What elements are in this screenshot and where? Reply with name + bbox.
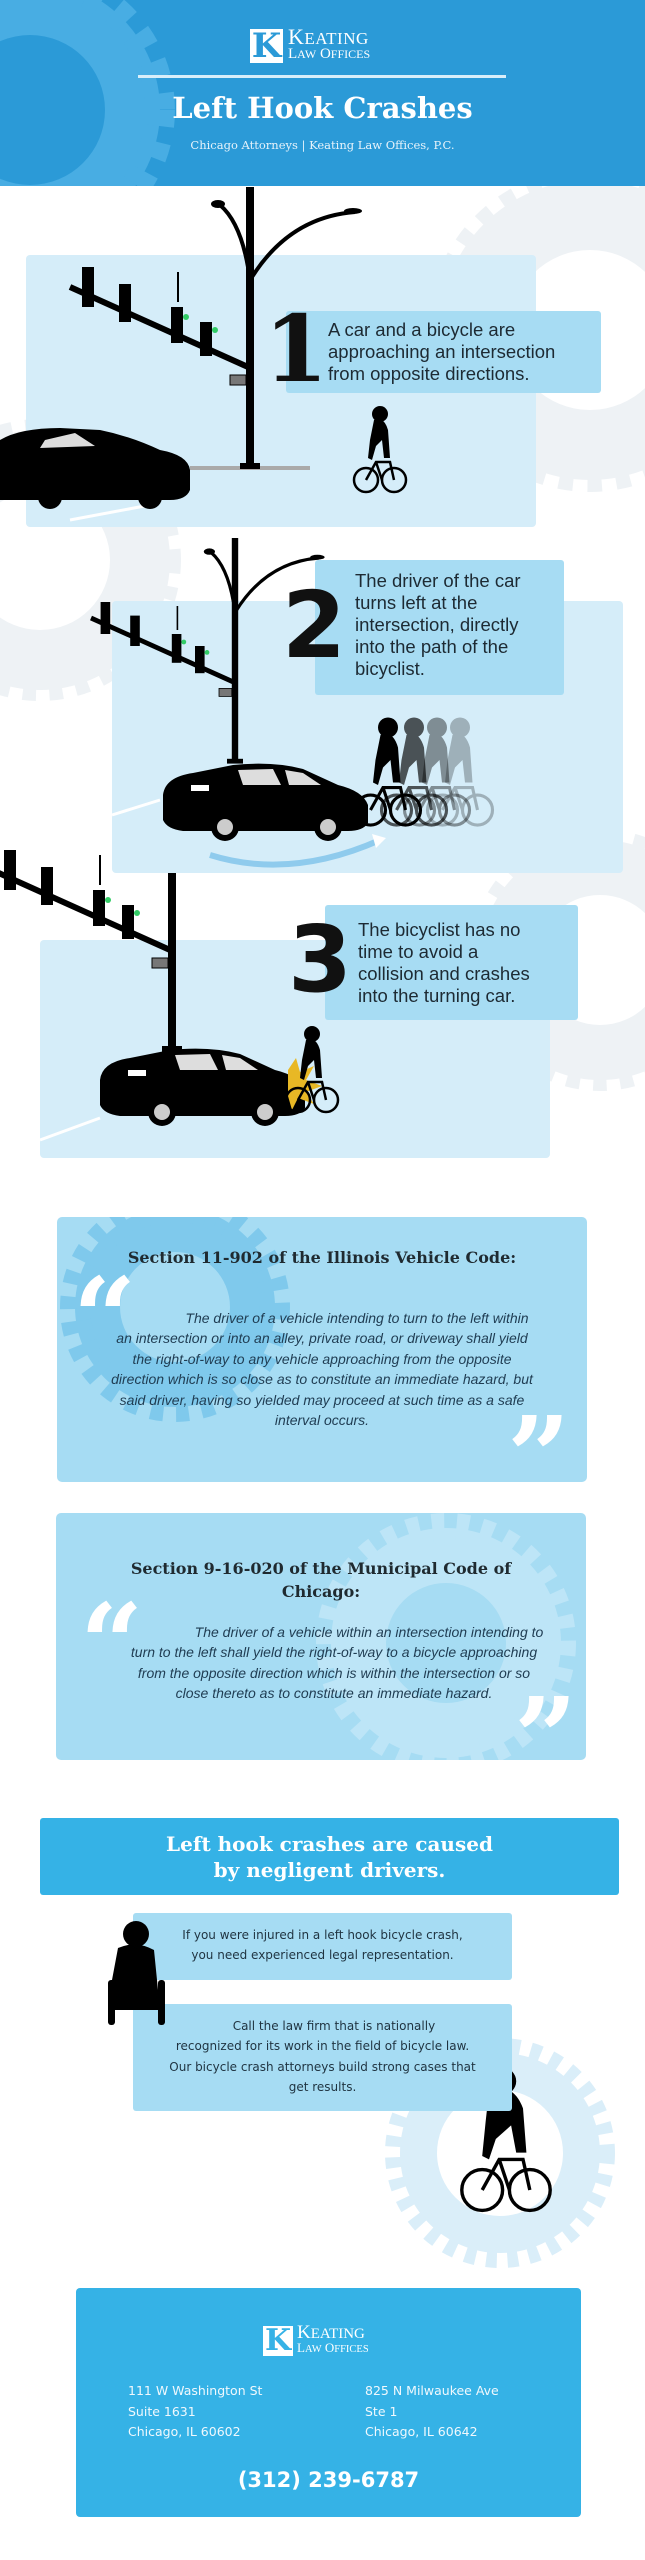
quote box: Municipal Code of Chicago: close thereto as to constitute an immediate hazard. bbox=[176, 1685, 492, 1701]
number 2: 2 bbox=[282, 572, 346, 679]
logo bbox=[250, 24, 370, 66]
quote box: Illinois Vehicle Code: interval occurs. bbox=[275, 1412, 369, 1428]
quote box: Illinois Vehicle Code: The driver of a vehicle intending to turn to the left within bbox=[185, 1310, 529, 1326]
step 2 text: turns left at the bbox=[355, 592, 477, 613]
banner: by negligent drivers. bbox=[214, 1858, 445, 1882]
address 1 bbox=[128, 2383, 262, 2439]
address 2 bbox=[365, 2383, 499, 2439]
quote box: Municipal Code of Chicago: from the opposite direction which is within the intersection or so bbox=[138, 1665, 530, 1681]
panel: step 1 bbox=[26, 255, 536, 527]
illustration: step 2 scene bbox=[90, 538, 494, 868]
address 2: Chicago, IL 60642 bbox=[365, 2424, 478, 2439]
quote box: Illinois Vehicle Code: direction which is so close as to constitute an immediate hazard, but bbox=[111, 1371, 533, 1387]
quote box: Illinois Vehicle Code bbox=[57, 1217, 587, 1482]
footer logo: K bbox=[265, 2323, 291, 2358]
heading: Section 11-902 of the Illinois Vehicle Code: bbox=[128, 1248, 516, 1267]
footer logo: LAW OFFICES bbox=[297, 2340, 369, 2355]
number 3: 3 bbox=[288, 906, 352, 1013]
number 1: 1 bbox=[264, 295, 328, 403]
quote box: Municipal Code of Chicago: turn to the left shall yield the right-of-way to a bicycle approaching bbox=[131, 1644, 537, 1660]
step 3 text: The bicyclist has no bbox=[358, 919, 520, 940]
footer bbox=[76, 2288, 581, 2517]
statement box 2: Our bicycle crash attorneys build strong cases that bbox=[169, 2060, 476, 2074]
quote box: Illinois Vehicle Code: an intersection or into an alley, private road, or driveway shall yield bbox=[116, 1330, 528, 1346]
logo: K bbox=[252, 26, 281, 66]
logo: KEATING bbox=[288, 24, 369, 49]
statement box 1: you need experienced legal representation. bbox=[191, 1948, 454, 1962]
address 2: 825 N Milwaukee Ave bbox=[365, 2383, 499, 2398]
logo: LAW OFFICES bbox=[288, 46, 370, 62]
panel: step 3 bbox=[40, 940, 550, 1158]
statement box 2: recognized for its work in the field of bicycle law. bbox=[176, 2039, 469, 2053]
statement box 1 bbox=[133, 1913, 512, 1980]
step 1 text: A car and a bicycle are bbox=[328, 319, 515, 340]
step 1 text bbox=[286, 311, 601, 393]
phone: (312) 239-6787 bbox=[238, 2468, 419, 2492]
illustration: step 1 scene bbox=[0, 187, 408, 522]
quote box: Illinois Vehicle Code: the right-of-way to any vehicle approaching from the opposite bbox=[132, 1351, 512, 1367]
quote box: Municipal Code of Chicago: The driver of a vehicle within an intersection intending to bbox=[195, 1624, 543, 1640]
address 1: 111 W Washington St bbox=[128, 2383, 262, 2398]
header bbox=[0, 0, 645, 186]
illustration: step 3 scene bbox=[0, 850, 340, 1142]
step 2 text: intersection, directly bbox=[355, 614, 518, 635]
step 3 text: into the turning car. bbox=[358, 985, 515, 1006]
footer logo: KEATING bbox=[297, 2322, 365, 2343]
step 2 text: bicyclist. bbox=[355, 658, 425, 679]
address 2: Ste 1 bbox=[365, 2404, 397, 2418]
open quote: “ bbox=[80, 1579, 143, 1708]
statement box 2: get results. bbox=[289, 2080, 356, 2094]
title: Left Hook Crashes bbox=[172, 91, 473, 125]
step 1 text: from opposite directions. bbox=[328, 363, 530, 384]
statement box 2 bbox=[133, 2004, 512, 2111]
sunburst with cyclist bbox=[385, 2038, 615, 2268]
address 1: Chicago, IL 60602 bbox=[128, 2424, 241, 2439]
step 2 text: into the path of the bbox=[355, 636, 508, 657]
statement box 1: If you were injured in a left hook bicycle crash, bbox=[182, 1928, 463, 1942]
step 3 text bbox=[325, 905, 578, 1020]
step 2 text bbox=[315, 560, 564, 695]
subtitle: Chicago Attorneys | Keating Law Offices, P.C. bbox=[190, 138, 455, 152]
step 2 text: The driver of the car bbox=[355, 570, 521, 591]
panel: step 2 bbox=[112, 601, 623, 873]
banner bbox=[40, 1818, 619, 1895]
statement box 2: Call the law firm that is nationally bbox=[233, 2019, 435, 2033]
step 3 text: collision and crashes bbox=[358, 963, 530, 984]
step 3 text: time to avoid a bbox=[358, 941, 478, 962]
banner: Left hook crashes are caused bbox=[166, 1832, 493, 1856]
quote box: Municipal Code of Chicago bbox=[56, 1513, 586, 1760]
heading: Section 9-16-020 of the Municipal Code of Chicago: bbox=[131, 1559, 511, 1601]
address 1: Suite 1631 bbox=[128, 2404, 196, 2418]
open quote: “ bbox=[73, 1253, 136, 1382]
quote box: Illinois Vehicle Code: said driver, having so yielded may proceed at such time as a safe bbox=[120, 1392, 524, 1408]
icon: wheelchair user bbox=[108, 1921, 165, 2025]
step 1 text: approaching an intersection bbox=[328, 341, 555, 362]
footer logo bbox=[263, 2322, 369, 2358]
